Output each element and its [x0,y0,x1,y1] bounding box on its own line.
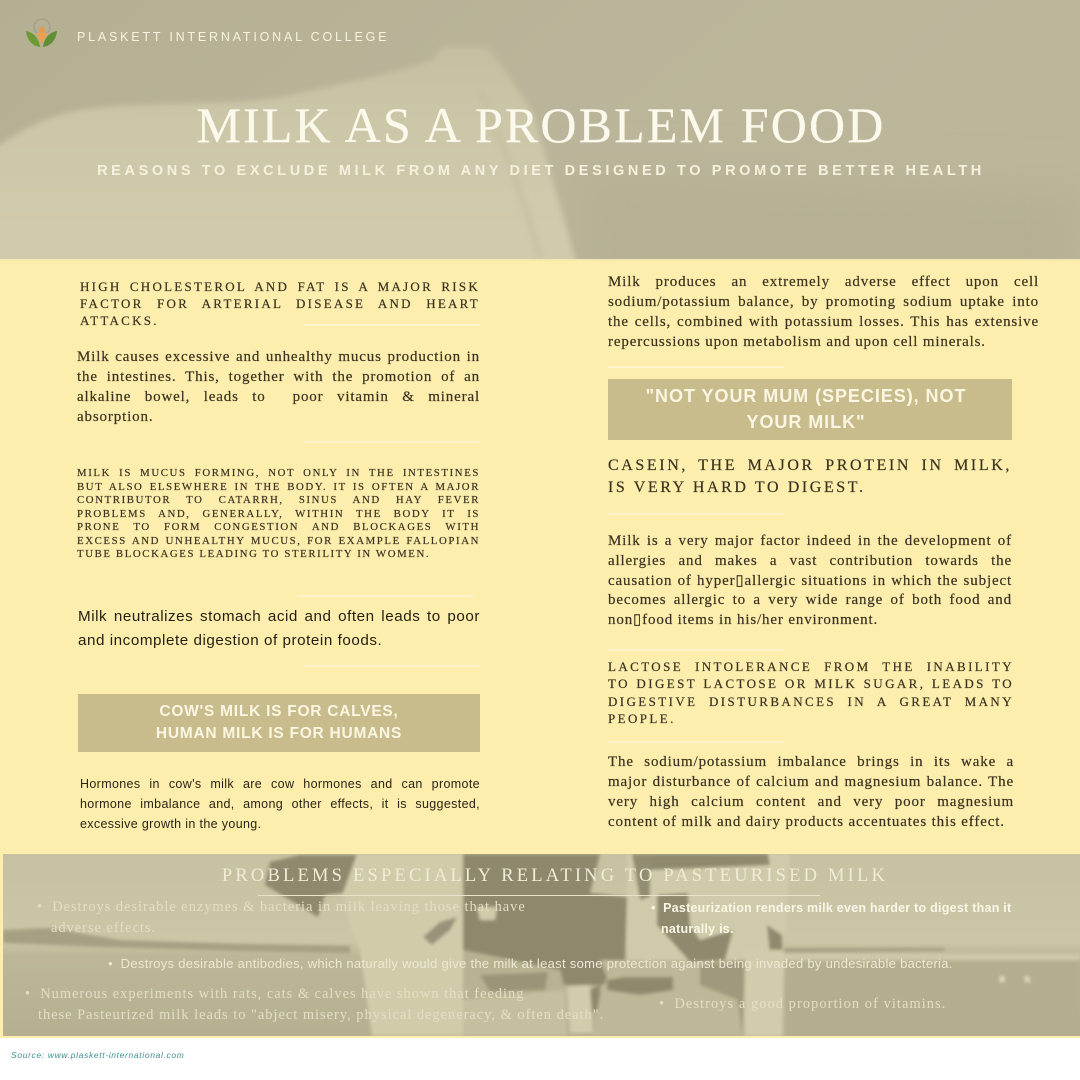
text: hormones: Hormones in cow's milk are cow hormones and can promote [80,777,480,791]
text: sodium potassium: sodium/potassium balance, by promoting sodium uptake into [608,294,1039,310]
banner: not your mum: "NOT YOUR MUM (SPECIES), NOT [646,386,966,406]
banner: not your mum [608,379,1012,440]
text: mucus production [77,349,480,425]
bullet: antibodies: • Destroys desirable antibodies, which naturally would give the milk at least some protection against being invaded by undesirable bacteria. [108,956,953,971]
banner: not your mum: YOUR MILK" [746,412,866,432]
text: hormones: excessive growth in the young. [80,817,261,831]
text: allergies: allergies and makes a vast contribution towards the [608,553,1012,569]
text: sodium potassium: repercussions upon metabolism and upon cell minerals. [608,334,986,350]
text: calcium magnesium: major disturbance of calcium and magnesium balance. The [608,774,1014,790]
bullet: harder to digest: naturally is. [661,922,734,936]
text: allergies [608,533,1012,628]
text: allergies: becomes allergic to a very wide range of both food and [608,592,1012,608]
text: sodium potassium: Milk produces an extremely adverse effect upon cell [608,274,1039,290]
text: lactose intolerance [608,659,1014,726]
subtitle: REASONS TO EXCLUDE MILK FROM ANY DIET DESIGNED TO PROMOTE BETTER HEALTH [97,163,985,179]
text: hormones: hormone imbalance and, among other effects, it is suggested, [80,797,480,811]
bullet: experiments: • Numerous experiments with rats, cats & calves have shown that feeding [25,986,524,1002]
text: casein [608,457,1012,496]
panel: pasteurised milk with cow photo [3,854,1080,1036]
text: lactose intolerance: LACTOSE INTOLERANCE FROM THE INABILITY [608,659,1014,674]
text: mucus forming: TUBE BLOCKAGES LEADING TO STERILITY IN WOMEN. [77,548,430,560]
text: casein: IS VERY HARD TO DIGEST. [608,479,866,496]
text: calcium magnesium: very high calcium content and very poor magnesium [608,794,1014,810]
text: stomach acid: and incomplete digestion of protein foods. [78,632,382,649]
banner: cow's milk: HUMAN MILK IS FOR HUMANS [156,725,402,742]
text: cholesterol [80,279,480,328]
text: lactose intolerance: PEOPLE. [608,711,676,726]
text: mucus production: Milk causes excessive and unhealthy mucus production in [77,349,480,365]
bullet: enzymes: • Destroys desirable enzymes & bacteria in milk leaving those that have [37,899,526,915]
title: MILK AS A PROBLEM FOOD [196,97,886,153]
panel heading: PROBLEMS ESPECIALLY RELATING TO PASTEURISED MILK [222,866,888,886]
text: calcium magnesium: content of milk and dairy products accentuates this effect. [608,814,1005,830]
icon: college logo [26,18,57,47]
text: calcium magnesium [608,754,1014,830]
text: mucus production: absorption. [77,409,153,425]
text: calcium magnesium: The sodium/potassium imbalance brings in its wake a [608,754,1014,770]
text: allergies: causation of hyper▯allergic situations in which the subject [608,573,1012,589]
text: allergies: non▯food items in his/her environment. [608,612,878,628]
bullet: harder to digest [651,901,1011,936]
college name: PLASKETT INTERNATIONAL COLLEGE [77,30,389,44]
text: mucus production: alkaline bowel, leads to poor vitamin & mineral [77,389,480,405]
bullet: vitamins: • Destroys a good proportion of vitamins. [659,996,946,1012]
text: stomach acid [78,608,480,649]
text: sodium potassium: the cells, combined with potassium losses. This has extensive [608,314,1039,330]
bullet: enzymes [37,899,526,936]
text: casein: CASEIN, THE MAJOR PROTEIN IN MILK, [608,457,1012,474]
text: sodium potassium [608,274,1039,350]
text: lactose intolerance: TO DIGEST LACTOSE OR MILK SUGAR, LEADS TO [608,676,1014,691]
source: Source: www.plaskett-international.com [11,1050,185,1060]
text: mucus forming: PROBLEMS AND, GENERALLY, WITHIN THE BODY IT IS [77,508,480,520]
text: mucus forming: CONTRIBUTOR TO CATARRH, SINUS AND HAY FEVER [77,494,480,506]
text: mucus forming: EXCESS AND UNHEALTHY MUCUS, FOR EXAMPLE FALLOPIAN [77,534,480,546]
bullet: experiments: these Pasteurized milk leads to "abject misery, physical degeneracy, & often death". [38,1007,604,1023]
text: mucus forming: MILK IS MUCUS FORMING, NOT ONLY IN THE INTESTINES [77,467,480,479]
text: cholesterol: FACTOR FOR ARTERIAL DISEASE AND HEART [80,296,480,311]
bullet: experiments [25,986,604,1023]
text: mucus forming: PRONE TO FORM CONGESTION AND BLOCKAGES WITH [77,521,480,533]
text: cholesterol: ATTACKS. [80,313,159,328]
bullet: enzymes: adverse effects. [51,920,156,936]
band: yellow content background [0,261,1080,1038]
banner: cow's milk [78,694,480,752]
text: mucus forming [77,467,480,560]
text: mucus production: the intestines. This, together with the promotion of an [77,369,480,385]
header panel: milk pouring photo [0,0,1080,261]
text: hormones [80,777,480,831]
text: allergies: Milk is a very major factor indeed in the development of [608,533,1012,549]
text: lactose intolerance: DIGESTIVE DISTURBANCES IN A GREAT MANY [608,694,1014,709]
text: stomach acid: Milk neutralizes stomach acid and often leads to poor [78,608,480,625]
bullet: harder to digest: • Pasteurization renders milk even harder to digest than it [651,901,1011,915]
text: mucus forming: BUT ALSO ELSEWHERE IN THE BODY. IT IS OFTEN A MAJOR [77,480,480,492]
text: cholesterol: HIGH CHOLESTEROL AND FAT IS A MAJOR RISK [80,279,480,294]
banner: cow's milk: COW'S MILK IS FOR CALVES, [159,703,399,720]
